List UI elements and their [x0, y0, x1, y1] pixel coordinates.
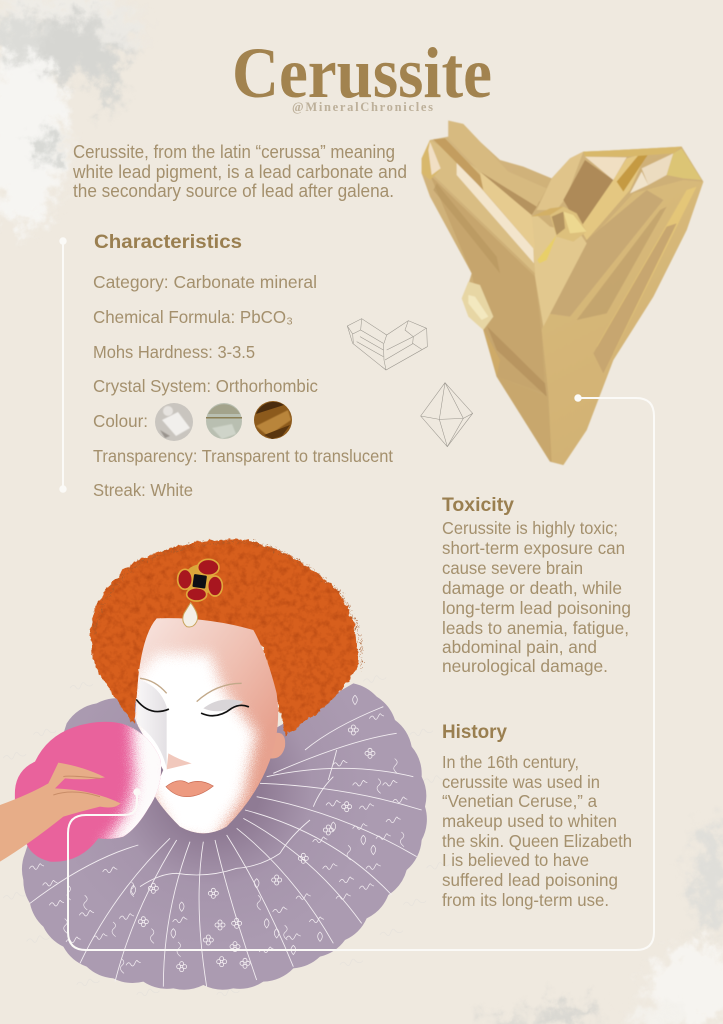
crystal illustration — [422, 121, 703, 465]
queen portrait illustration — [0, 539, 449, 996]
characteristics list: Transparency: Transparent to translucent — [93, 446, 393, 466]
toxicity text: damage or death, while — [442, 578, 622, 598]
history text: I is believed to have — [442, 850, 589, 870]
toxicity text: short-term exposure can — [442, 538, 625, 558]
characteristics list: Category: Carbonate mineral — [93, 272, 317, 292]
toxicity text: Cerussite is highly toxic; — [442, 518, 618, 538]
history heading: History — [442, 721, 507, 743]
toxicity text — [442, 518, 631, 676]
connector line: crystal to queen — [68, 394, 654, 950]
history text: the skin. Queen Elizabeth — [442, 831, 632, 851]
smudge: bottom right — [485, 825, 723, 1024]
brooch — [178, 559, 222, 601]
intro text: Cerussite, from the latin “cerussa” meaning — [73, 142, 395, 162]
hair — [91, 539, 359, 733]
history text: suffered lead poisoning — [442, 870, 618, 890]
eyes — [137, 700, 248, 716]
ear — [270, 733, 285, 759]
characteristics bracket line — [59, 237, 67, 493]
title: Cerussite — [232, 33, 492, 113]
hand — [0, 763, 121, 862]
colour swatch: white — [155, 403, 193, 441]
history text: cerussite was used in — [442, 772, 600, 792]
characteristics list: Crystal System: Orthorhombic — [93, 376, 318, 396]
face — [133, 618, 278, 843]
intro text: white lead pigment, is a lead carbonate and — [72, 162, 407, 182]
characteristics list: Chemical Formula: PbCO₃ — [93, 307, 293, 327]
history text: In the 16th century, — [442, 752, 579, 772]
toxicity text: neurological damage. — [442, 656, 608, 676]
smudge: top left — [0, 0, 146, 230]
powder puff — [14, 722, 162, 862]
history text — [442, 752, 632, 910]
intro text: the secondary source of lead after galena. — [73, 181, 394, 201]
characteristics heading: Characteristics — [94, 231, 242, 253]
lace fringe — [3, 676, 449, 996]
toxicity text: abdominal pain, and — [442, 637, 597, 657]
toxicity text: leads to anemia, fatigue, — [442, 618, 629, 638]
icon: crystal wireframe twin — [347, 319, 427, 370]
lips — [166, 781, 213, 797]
handle: @MineralChronicles — [292, 100, 433, 114]
history text: from its long-term use. — [442, 890, 609, 910]
pearl — [183, 603, 198, 627]
nose and eye shadow — [137, 680, 167, 768]
toxicity text: long-term lead poisoning — [442, 598, 631, 618]
colour swatch: grey-green — [206, 403, 242, 439]
icon: octahedron wireframe — [421, 383, 473, 447]
lace ruff — [22, 683, 427, 990]
toxicity text: cause severe brain — [442, 558, 583, 578]
characteristics list: Colour: — [93, 411, 148, 431]
intro text — [72, 142, 407, 201]
characteristics list — [93, 272, 393, 500]
toxicity heading: Toxicity — [442, 494, 514, 516]
characteristics list: Streak: White — [93, 480, 193, 500]
history text: “Venetian Ceruse,” a — [442, 791, 597, 811]
history text: makeup used to whiten — [442, 811, 617, 831]
characteristics list: Mohs Hardness: 3-3.5 — [93, 342, 255, 362]
colour swatch: amber — [254, 401, 292, 439]
